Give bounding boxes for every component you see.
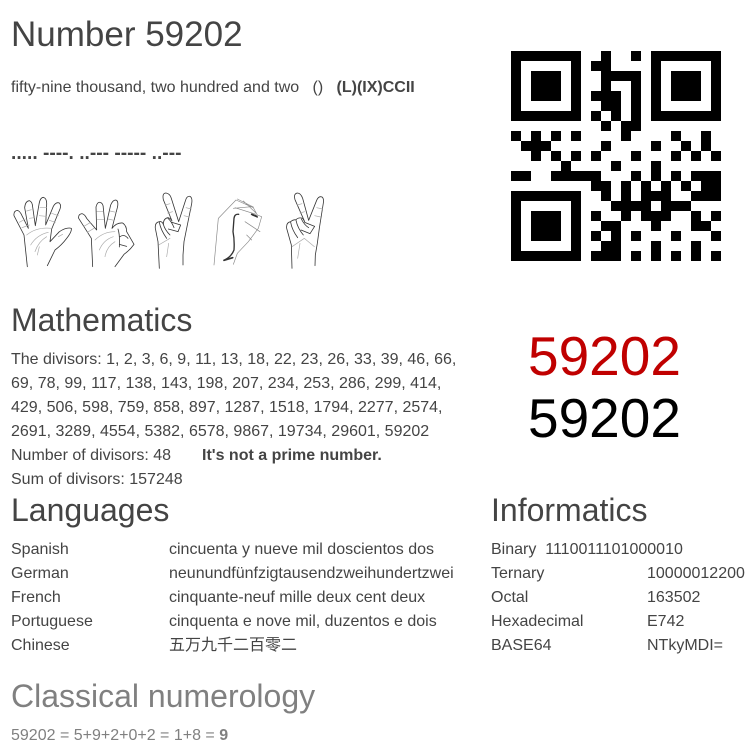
languages table: cincuenta y nueve mil doscientos dos [169, 541, 434, 558]
informatics table: 163502 [647, 589, 700, 606]
list of divisors: The divisors: 1, 2, 3, 6, 9, 11, 13, 18, 22, 23, 26, 33, 39, 46, 66, [11, 351, 456, 368]
list of divisors [11, 351, 456, 488]
heading: classical numerology: Classical numerology [11, 678, 315, 714]
languages table: Spanish [11, 541, 69, 558]
list of divisors: It's not a prime number. [202, 447, 382, 464]
list of divisors: 2691, 3289, 4554, 5382, 6578, 9867, 19734, 29601, 59202 [11, 423, 429, 440]
list of divisors: 69, 78, 99, 117, 138, 143, 198, 207, 234, 253, 286, 299, 414, [11, 375, 441, 392]
informatics table [491, 541, 745, 654]
languages table: cinquante-neuf mille deux cent deux [169, 589, 425, 606]
list of divisors: Sum of divisors: 157248 [11, 471, 183, 488]
informatics table: Octal [491, 589, 528, 606]
QR code [511, 51, 721, 261]
languages table [11, 541, 454, 654]
languages table: neunundfünfzigtausendzweihundertzwei [169, 565, 454, 582]
heading: mathematics: Mathematics [11, 302, 192, 338]
informatics table: Hexadecimal [491, 613, 583, 630]
languages table: French [11, 589, 61, 606]
large number in red: 59202 [528, 325, 681, 387]
informatics table: Binary 1110011101000010 [491, 541, 683, 558]
informatics table: E742 [647, 613, 684, 630]
informatics table: NTkyMDI= [647, 637, 723, 654]
languages table: 五万九千二百零二 [169, 637, 297, 654]
informatics table: Ternary [491, 565, 544, 582]
heading: languages: Languages [11, 492, 169, 528]
list of divisors: 429, 506, 598, 759, 858, 897, 1287, 1518, 1794, 2277, 2574, [11, 399, 442, 416]
icon: sign language hands [14, 192, 324, 269]
languages table: cinquenta e nove mil, duzentos e dois [169, 613, 437, 630]
languages table: German [11, 565, 69, 582]
heading: informatics: Informatics [491, 492, 647, 528]
numerology calculation: 59202 = 5+9+2+0+2 = 1+8 = 9 [11, 727, 228, 744]
title: Number 59202 [11, 15, 243, 54]
large number in black: 59202 [528, 387, 681, 449]
morse code: ..... ----. ..--- ----- ..--- [11, 143, 181, 164]
informatics table: 10000012200 [647, 565, 745, 582]
languages table: Portuguese [11, 613, 93, 630]
number in words and roman numeral: fifty-nine thousand, two hundred and two () (L)(IX)CCII [11, 79, 415, 96]
informatics table: BASE64 [491, 637, 551, 654]
list of divisors: Number of divisors: 48 [11, 447, 171, 464]
languages table: Chinese [11, 637, 70, 654]
